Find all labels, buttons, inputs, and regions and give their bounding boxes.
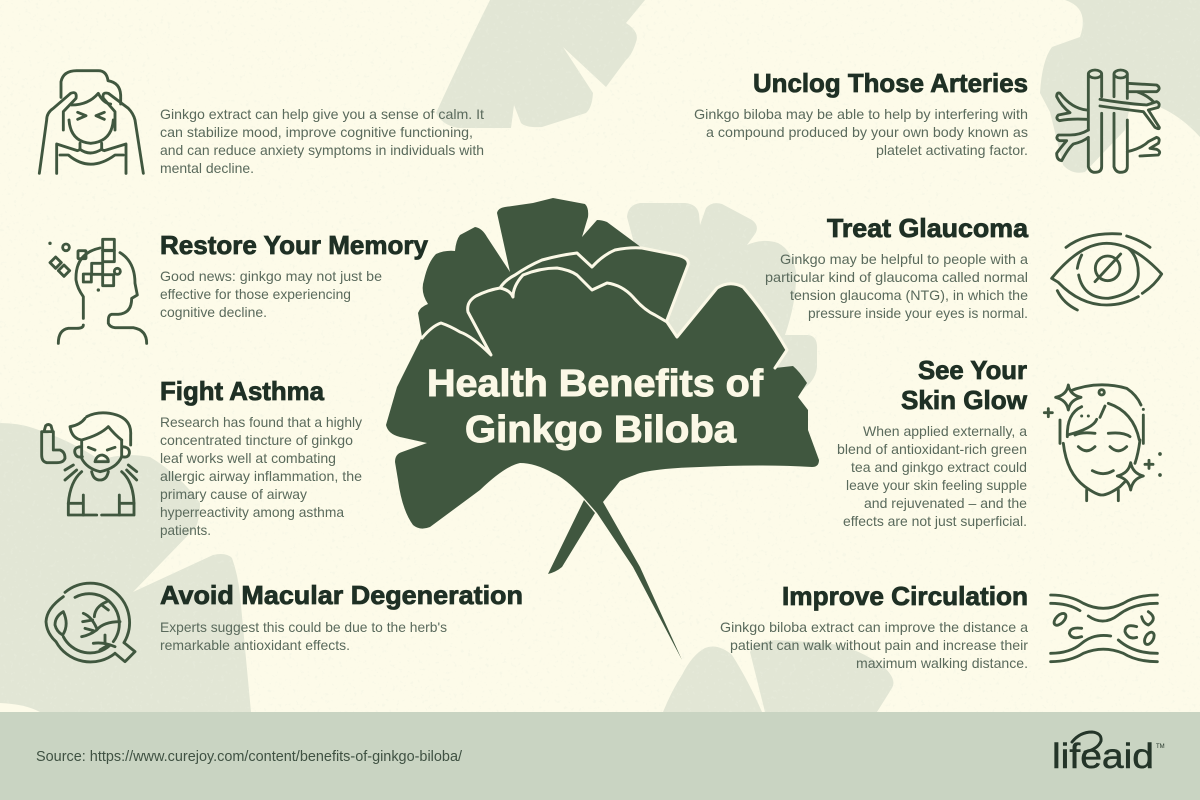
text block: See Your Skin Glow: When applied externally, a <box>863 423 1027 439</box>
text block: Fight Asthma: allergic airway inflammation, the <box>160 468 362 484</box>
text block: Fight Asthma: leaf works well at combating <box>160 450 336 466</box>
title <box>427 363 763 451</box>
text block: calm <box>160 106 484 176</box>
background leaf: bottom left <box>0 423 251 712</box>
text block: See Your Skin Glow: leave your skin feeling supple <box>846 477 1027 493</box>
text block: See Your Skin Glow: tea and ginkgo extract could <box>851 459 1027 475</box>
text block: Unclog Those Arteries <box>694 68 1028 158</box>
background leaf: bottom center right <box>663 640 893 712</box>
text block: See Your Skin Glow <box>837 355 1028 529</box>
text block: See Your Skin Glow: Skin Glow <box>901 385 1028 415</box>
text block: Unclog Those Arteries: platelet activating factor. <box>876 142 1028 158</box>
text block: Fight Asthma: patients. <box>160 522 211 538</box>
text block: Fight Asthma: hyperreactivity among asthma <box>160 504 344 520</box>
text block: Fight Asthma: Fight Asthma <box>160 376 325 406</box>
text block: Unclog Those Arteries: a compound produced by your own body known as <box>706 124 1028 140</box>
text block: Improve Circulation: maximum walking distance. <box>856 655 1028 671</box>
leaf vein outlines <box>422 248 787 368</box>
text block: Restore Your Memory: Good news: ginkgo may not just be <box>160 268 382 284</box>
text block: Treat Glaucoma: particular kind of glaucoma called normal <box>765 269 1028 285</box>
text block: Fight Asthma: concentrated tincture of ginkgo <box>160 432 353 448</box>
title: Ginkgo Biloba <box>465 409 737 451</box>
text block: See Your Skin Glow: blend of antioxidant-rich green <box>837 441 1027 457</box>
text block: Restore Your Memory: effective for those experiencing <box>160 286 351 302</box>
text block: See Your Skin Glow: See Your <box>918 355 1027 385</box>
text block: calm: can stabilize mood, improve cognitive functioning, <box>160 124 473 140</box>
text block: Restore Your Memory: cognitive decline. <box>160 304 267 320</box>
text block: Treat Glaucoma: tension glaucoma (NTG), in which the <box>790 287 1028 303</box>
source text: Source: https://www.curejoy.com/content/benefits-of-ginkgo-biloba/ <box>36 748 463 765</box>
text block: Improve Circulation: patient can walk without pain and increase their <box>730 637 1028 653</box>
text block: calm: and can reduce anxiety symptoms in individuals with <box>160 142 484 158</box>
text block: Improve Circulation: Ginkgo biloba extract can improve the distance a <box>720 619 1028 635</box>
text block: Treat Glaucoma: Treat Glaucoma <box>827 213 1029 243</box>
text block: Unclog Those Arteries: Ginkgo biloba may be able to help by interfering with <box>694 106 1028 122</box>
text block: Avoid Macular Degeneration: remarkable antioxidant effects. <box>160 637 350 653</box>
icon: blood vessel <box>1051 595 1157 662</box>
title: Health Benefits of <box>427 363 763 405</box>
footer band <box>0 712 1200 800</box>
background leaf: top center <box>436 0 645 128</box>
text block: See Your Skin Glow: effects are not just superficial. <box>843 513 1027 529</box>
text block: Treat Glaucoma: Ginkgo may be helpful to people with a <box>780 251 1028 267</box>
logo: lifeaid: lifeaid <box>1052 737 1154 776</box>
icon: arteries <box>1057 70 1160 172</box>
icon: head with pixels <box>48 239 147 343</box>
text block: Avoid Macular Degeneration <box>160 580 523 653</box>
text block: Avoid Macular Degeneration: Avoid Macular Degeneration <box>160 580 523 610</box>
logo: lifeaid: TM <box>1156 744 1165 750</box>
text block: Improve Circulation <box>720 581 1028 671</box>
text block: calm: Ginkgo extract can help give you a sense of calm. It <box>160 106 484 122</box>
text block: Treat Glaucoma <box>765 213 1029 321</box>
text block: Improve Circulation: Improve Circulation <box>782 581 1028 611</box>
text block: See Your Skin Glow: and rejuvenated – and the <box>864 495 1027 511</box>
icon: eyeball retina <box>46 583 135 662</box>
text block: Fight Asthma <box>160 376 362 538</box>
icon: glowing face <box>1044 385 1162 501</box>
text block: Restore Your Memory <box>160 230 429 320</box>
text block: Fight Asthma: primary cause of airway <box>160 486 307 502</box>
text block: calm: mental decline. <box>160 160 254 176</box>
text block: Unclog Those Arteries: Unclog Those Arteries <box>753 68 1028 98</box>
background leaf: top right <box>1040 0 1200 173</box>
icon: eye with crossed pupil <box>1052 234 1162 310</box>
text block: Fight Asthma: Research has found that a highly <box>160 414 362 430</box>
text block: Treat Glaucoma: pressure inside your eyes is normal. <box>808 305 1028 321</box>
icon: stressed person holding head <box>39 71 143 173</box>
main ginkgo leaf <box>386 198 819 660</box>
background leaf: behind main leaf <box>627 203 817 420</box>
text block: Avoid Macular Degeneration: Experts suggest this could be due to the herb's <box>160 619 447 635</box>
text block: Restore Your Memory: Restore Your Memory <box>160 230 429 260</box>
icon: child with inhaler <box>42 413 137 515</box>
